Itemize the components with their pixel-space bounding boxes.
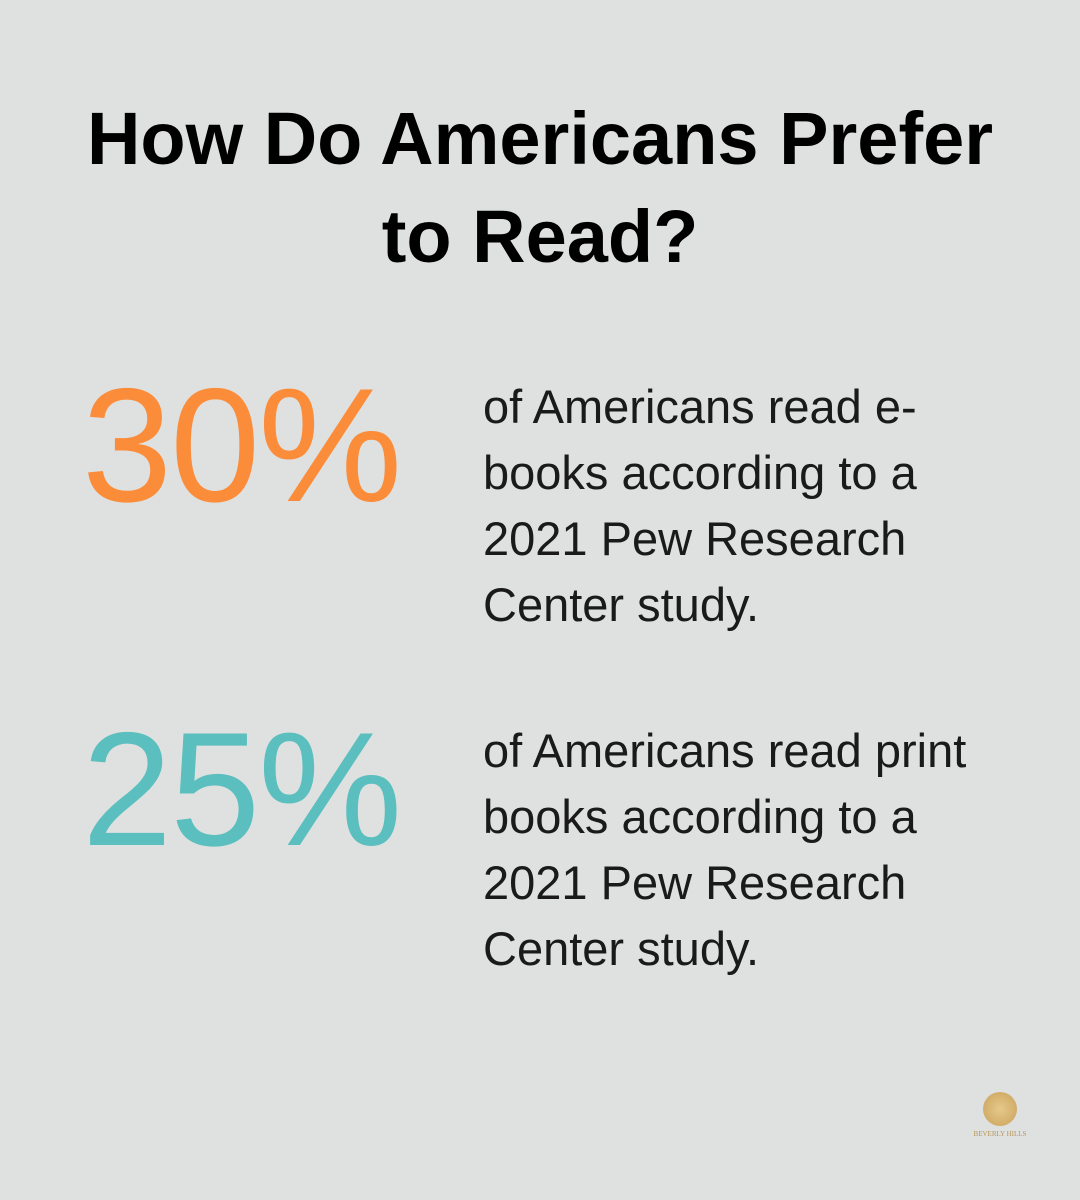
text: e-books: Center study. bbox=[483, 578, 759, 631]
text: e-books: of Americans read e- bbox=[483, 380, 917, 433]
text: e-books: books according to a bbox=[483, 446, 917, 499]
text: print: 2021 Pew Research bbox=[483, 856, 906, 909]
title: How Do Americans Prefer bbox=[87, 97, 993, 180]
text: e-books bbox=[483, 380, 917, 631]
text: print: of Americans read print bbox=[483, 724, 966, 777]
logo bbox=[974, 1092, 1026, 1138]
logo: BEVERLY HILLS bbox=[974, 1130, 1026, 1138]
text: print bbox=[483, 724, 966, 975]
title: to Read? bbox=[382, 195, 698, 278]
title bbox=[87, 97, 993, 278]
text: print: Center study. bbox=[483, 922, 759, 975]
text: e-books: 2021 Pew Research bbox=[483, 512, 906, 565]
stat: 30%: 30% bbox=[82, 355, 400, 536]
text: print: books according to a bbox=[483, 790, 917, 843]
stat: 25%: 25% bbox=[82, 699, 400, 880]
